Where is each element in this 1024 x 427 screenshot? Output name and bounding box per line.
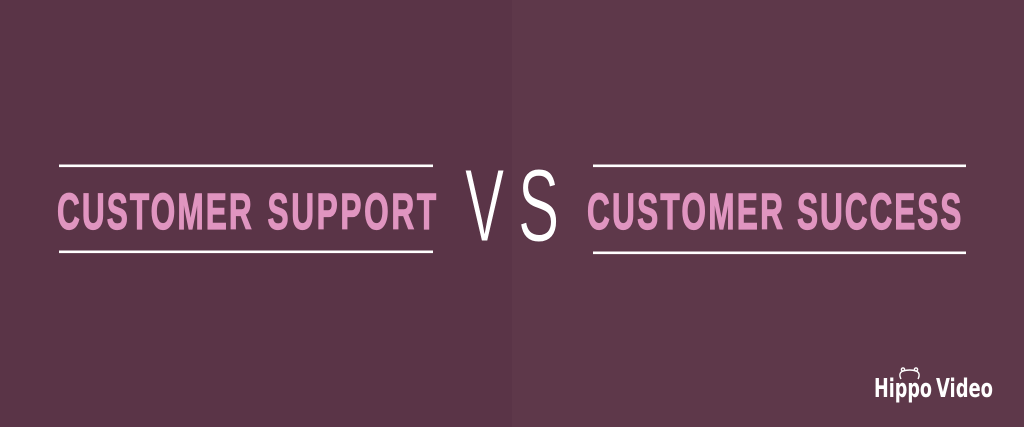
panel: right background [512, 0, 1024, 427]
heading: customer success [587, 164, 966, 254]
logo: Hippo Video: Hippo [874, 374, 932, 404]
logo: Hippo Video [874, 368, 993, 404]
logo: Hippo Video: Video [936, 374, 993, 404]
heading: customer support [57, 164, 436, 253]
heading: customer support: SUPPORT [268, 183, 436, 240]
heading: customer success: CUSTOMER [587, 183, 783, 240]
heading: customer support: CUSTOMER [57, 183, 252, 240]
heading: VS [465, 148, 559, 263]
panel: left background [0, 0, 512, 427]
heading: VS: S [518, 148, 559, 263]
heading: customer success: SUCCESS [797, 183, 961, 240]
heading: VS: V [465, 148, 504, 263]
icon: hippo head [900, 368, 919, 379]
